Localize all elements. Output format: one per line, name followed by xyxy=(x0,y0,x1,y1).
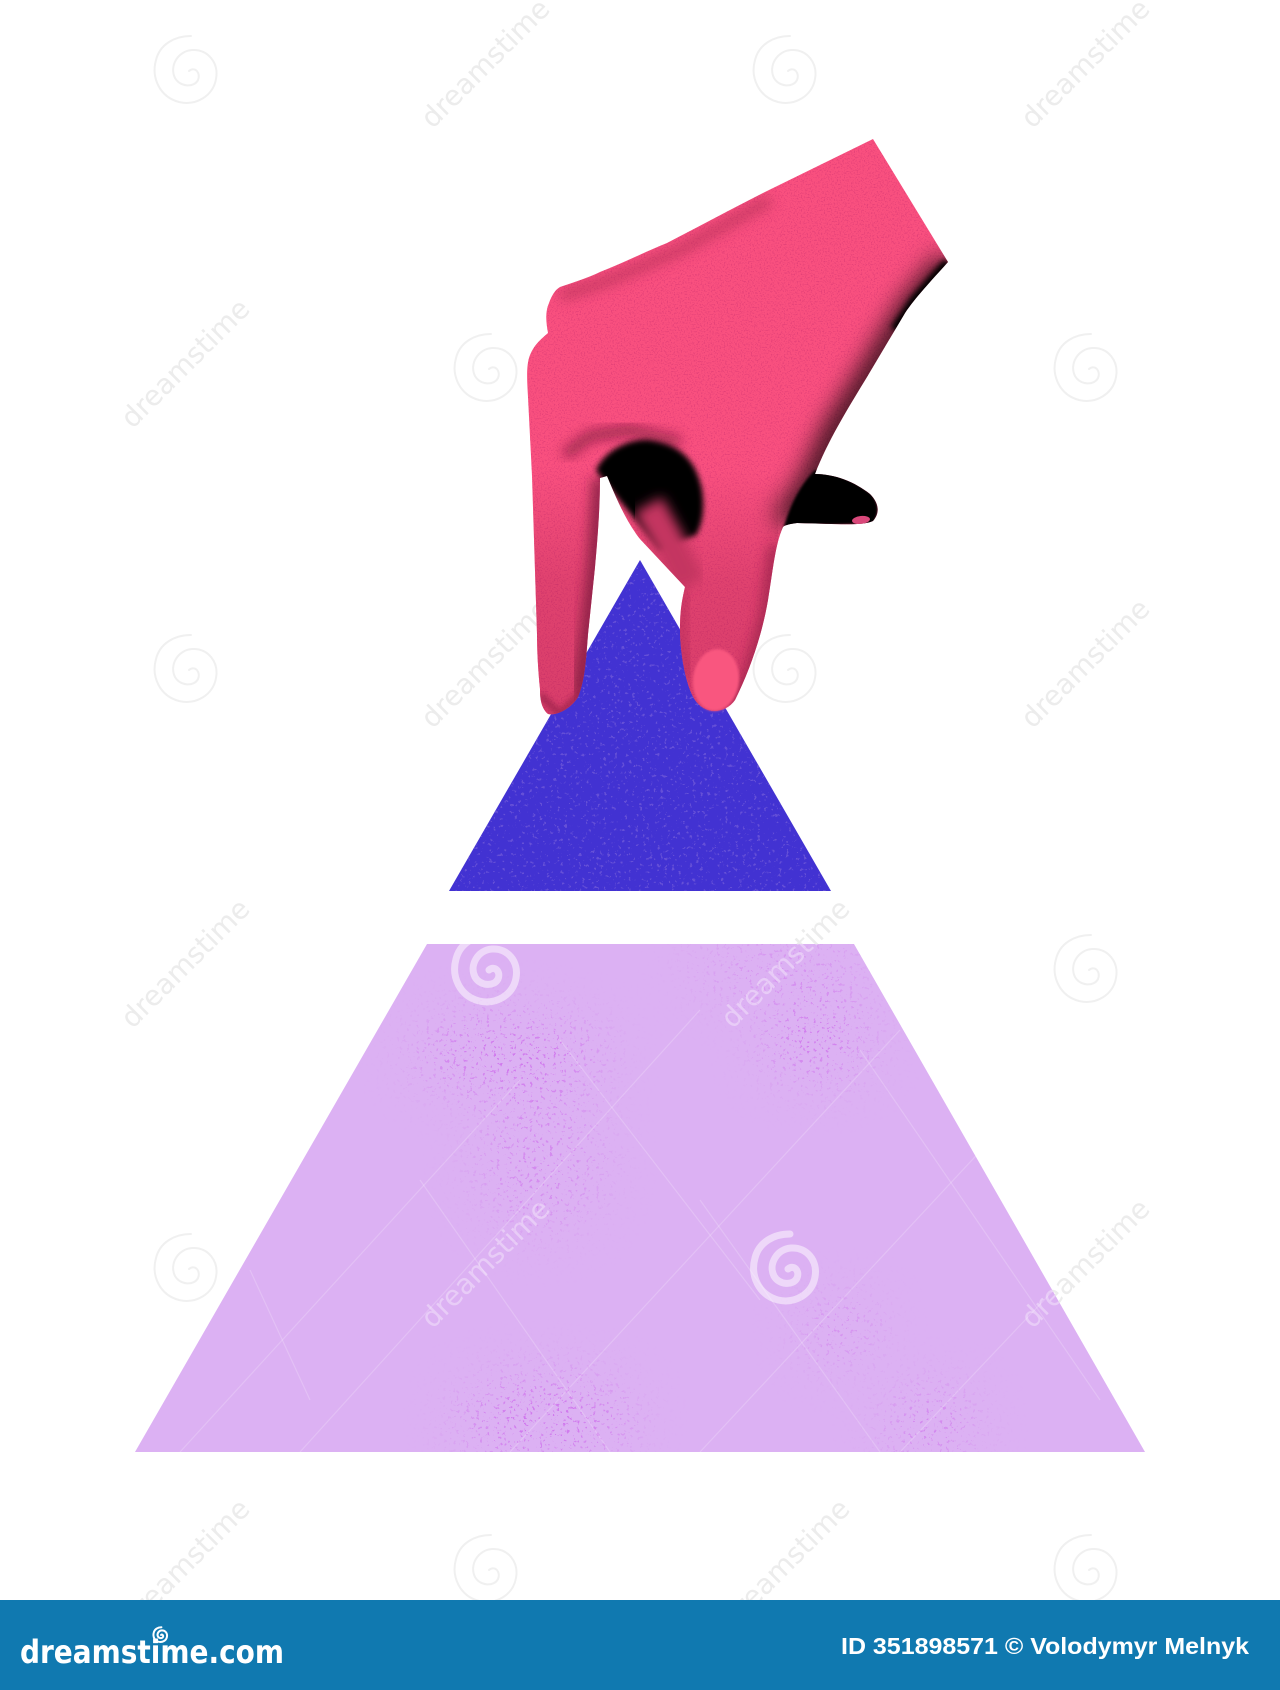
watermark pattern on white: dreamstime xyxy=(114,292,256,434)
watermark pattern on white: dreamstime xyxy=(114,892,256,1034)
watermark pattern on white: dreamstime xyxy=(714,1492,856,1634)
blue pyramid top triangle xyxy=(449,560,831,891)
knuckle crease xyxy=(565,430,680,455)
footer banner xyxy=(0,1600,1280,1690)
watermark pattern on white: dreamstime xyxy=(414,592,556,734)
shadow between fingers xyxy=(596,440,703,550)
lavender pyramid base: dreamstime xyxy=(1014,1192,1156,1334)
lavender pyramid base: dreamstime xyxy=(714,892,856,1034)
watermark pattern on white: dreamstime xyxy=(714,892,856,1034)
black thumb behind the hand xyxy=(783,470,878,530)
watermark pattern on white: dreamstime xyxy=(1014,592,1156,734)
hand base silhouette xyxy=(527,139,948,714)
image id and credit: ID 351898571 © Volodymyr Melnyk xyxy=(841,1633,1249,1659)
hand xyxy=(527,139,950,729)
watermark pattern on white: dreamstime xyxy=(1014,1192,1156,1334)
middle finger emerging from the shadow xyxy=(648,505,690,585)
lavender pyramid base: dreamstime xyxy=(414,1192,556,1334)
finger nail xyxy=(690,647,742,713)
lavender pyramid base xyxy=(135,944,1145,1452)
watermark pattern on white xyxy=(114,0,1156,1634)
logo spiral icon xyxy=(153,1627,167,1642)
banner logo: dreamstime.com xyxy=(20,1633,284,1671)
watermark pattern on white: dreamstime xyxy=(114,1492,256,1634)
hand shading xyxy=(528,139,950,729)
